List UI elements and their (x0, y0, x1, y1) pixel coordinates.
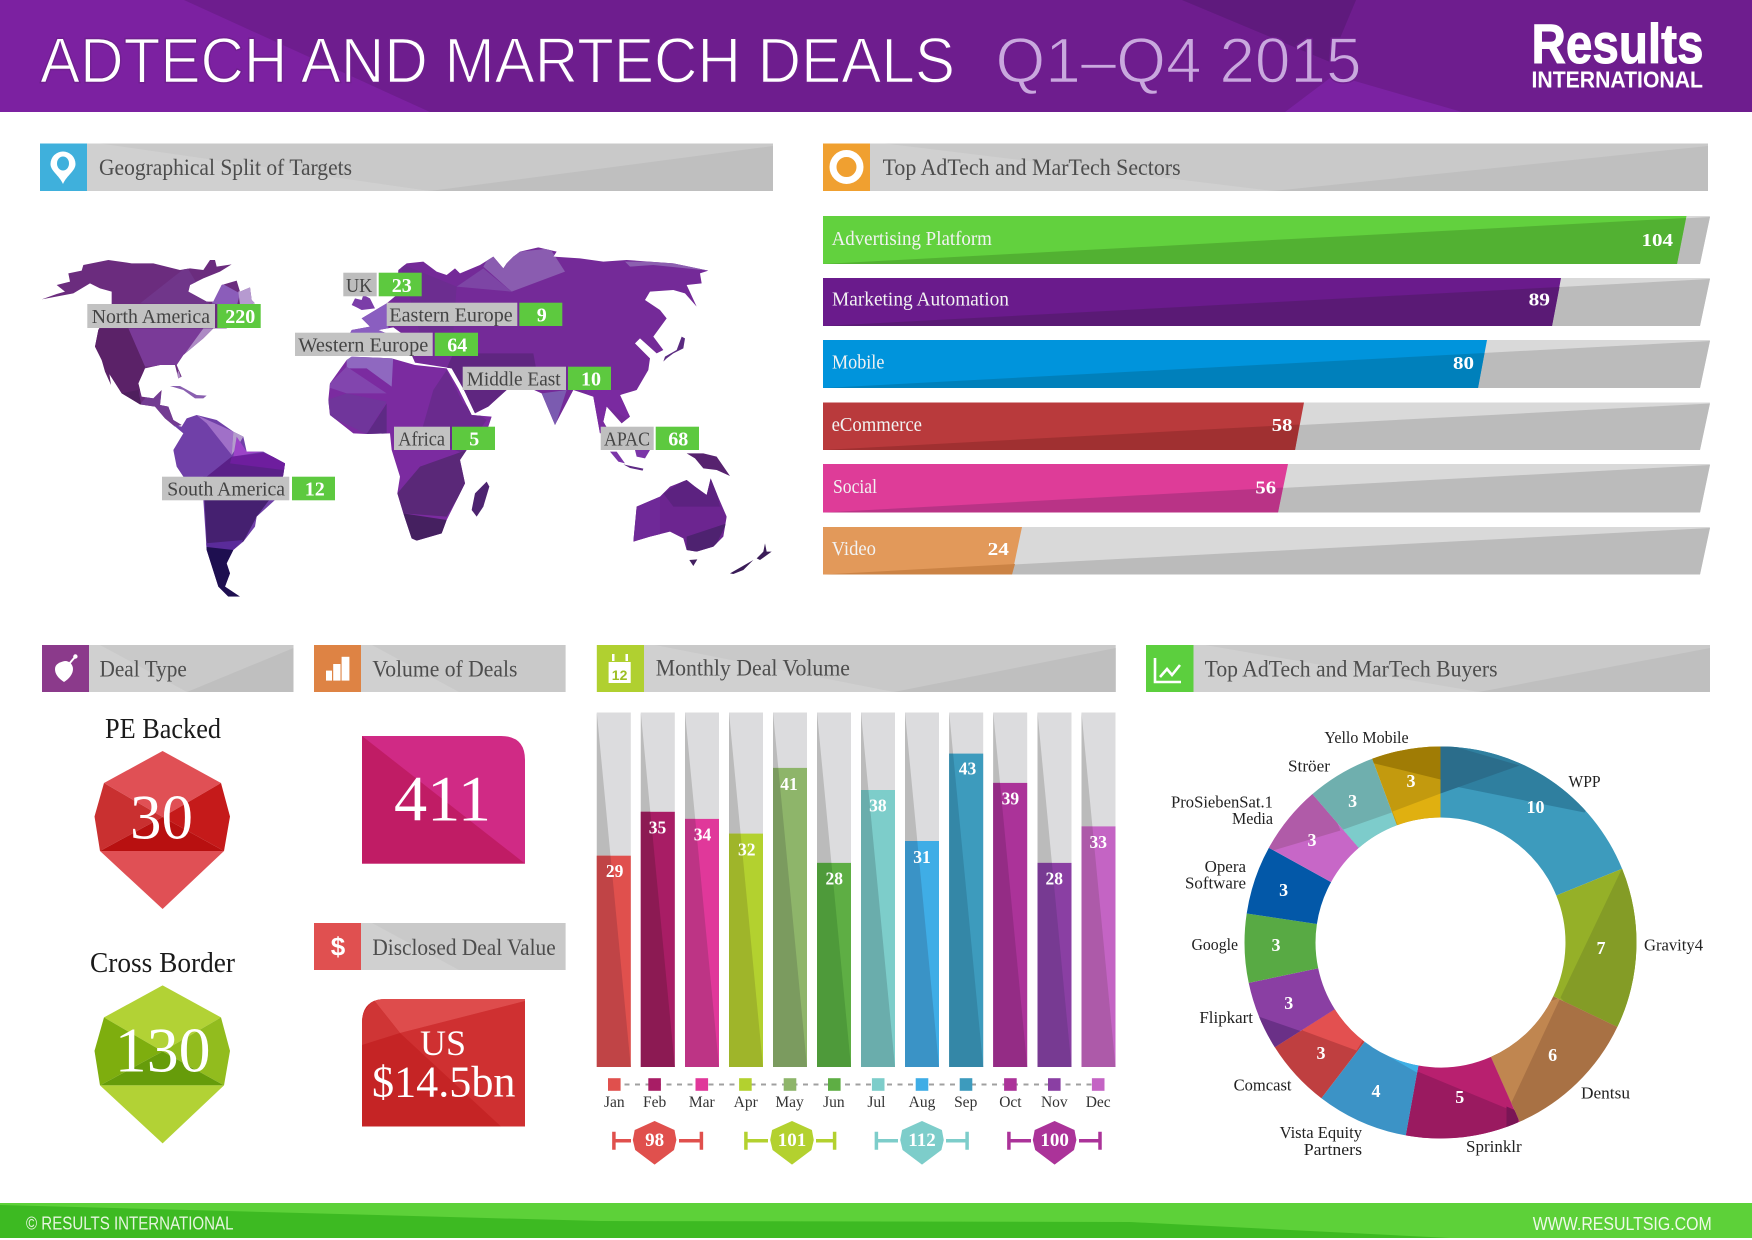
tag: Africa 5: Africa (398, 428, 445, 450)
heading: top sectors: Top AdTech and MarTech Sectors (883, 155, 1181, 180)
donut values: 3 (1316, 1043, 1326, 1063)
island: tasmania (689, 559, 697, 566)
tag: Western Europe 64 (295, 333, 478, 357)
footer: website: WWW.RESULTSIG.COM (1533, 1214, 1712, 1234)
bar: Video 24: Video (832, 538, 876, 560)
donut chart (1244, 746, 1636, 1138)
badge: cross border 130: 130 (115, 1015, 210, 1086)
donut labels: WPP (1568, 772, 1601, 791)
bar: Sep 43: 43 (959, 759, 976, 779)
month legend: Apr (734, 1094, 759, 1111)
donut values: 3 (1406, 771, 1416, 791)
month legend: Feb (643, 1094, 666, 1111)
tag: North America 220: North America (92, 306, 210, 328)
bar: Jun 28: 28 (826, 868, 843, 888)
donut labels: ProSiebenSat.1 (1171, 792, 1273, 811)
badge: PE backed 30 (94, 751, 230, 909)
donut values: 3 (1284, 993, 1293, 1013)
bar: eCommerce 58: eCommerce (832, 414, 922, 436)
tag: North America 220: 220 (225, 306, 255, 328)
tag: Middle East 10: Middle East (467, 368, 561, 390)
donut values (1272, 771, 1606, 1107)
donut values: 10 (1526, 797, 1544, 817)
subtitle: period: Q1–Q4 2015 (996, 24, 1362, 96)
logo: Results International: INTERNATIONAL (1532, 66, 1703, 92)
quarter total: Q1 98 (614, 1121, 701, 1165)
map: north america (42, 260, 255, 427)
panel: monthly deal volume (597, 645, 1116, 1165)
icon: leaf with stem (55, 654, 78, 682)
panel: geographical split of targets (40, 144, 773, 610)
panel: top buyers (1146, 645, 1710, 1162)
tag: Western Europe 64: 64 (447, 335, 467, 357)
heading: top sectors (823, 144, 1708, 191)
bar: Video 24: 24 (988, 539, 1009, 559)
bar: Social 56: Social (833, 476, 877, 498)
tag: Africa 5 (394, 427, 495, 450)
quarter total: Q3 112 (876, 1121, 967, 1165)
month legend (604, 1078, 1111, 1111)
donut values: 3 (1308, 830, 1316, 850)
bar: Dec 33: 33 (1089, 832, 1107, 852)
segment: Google 3 (1245, 914, 1318, 983)
footer (0, 1203, 1752, 1238)
heading: volume of deals (314, 645, 566, 692)
donut labels: Comcast (1234, 1075, 1292, 1094)
heading: deal type (42, 645, 294, 692)
bar: Jun 28 (817, 712, 851, 1067)
donut labels: Gravity4 (1644, 936, 1703, 955)
bar: May 41 (773, 712, 807, 1067)
tag: North America 220 (87, 304, 261, 328)
bar: Video 24 (823, 527, 1710, 574)
bar: Oct 39 (993, 712, 1027, 1067)
donut labels: Vista Equity (1280, 1123, 1363, 1142)
logo: Results International (1532, 12, 1704, 92)
tag: UK 23: UK (346, 275, 372, 297)
donut labels: Dentsu (1581, 1084, 1630, 1102)
badge: PE backed 30: 30 (130, 782, 193, 853)
bar: Mobile 80: Mobile (832, 352, 885, 374)
segment: ProSiebenSat.1 Media 3 (1268, 794, 1359, 882)
tag: UK 23 (343, 273, 422, 297)
heading: geographical split: Geographical Split of Targets (99, 155, 352, 180)
segment: Sprinklr 5 (1406, 1056, 1520, 1138)
donut values: 3 (1272, 935, 1280, 955)
donut values: 6 (1548, 1045, 1557, 1065)
bar: Nov 28: 28 (1046, 868, 1063, 888)
tag: Eastern Europe 9: 9 (537, 305, 547, 327)
heading: geographical split (40, 144, 773, 191)
quarter total: Q2 101 (746, 1121, 835, 1165)
bar: Advertising Platform 104: 104 (1642, 230, 1673, 250)
badge: cross border 130 (94, 985, 230, 1143)
tag: Middle East 10 (463, 367, 611, 390)
icon: map pin (50, 152, 76, 184)
donut labels: Yello Mobile (1324, 728, 1409, 747)
tag: Eastern Europe 9: Eastern Europe (389, 305, 513, 327)
tag: South America 12 (162, 477, 335, 501)
bar: Aug 31: 31 (913, 847, 931, 867)
bar: Jul 38 (861, 712, 895, 1067)
bar: Marketing Automation 89 (823, 278, 1710, 326)
islands: south-east asia (610, 452, 625, 463)
bar: Mar 34: 34 (694, 825, 712, 845)
bar: Advertising Platform 104 (823, 216, 1710, 264)
donut values: 5 (1455, 1087, 1464, 1107)
bar: Dec 33 (1082, 712, 1116, 1067)
bar: Oct 39: 39 (1002, 788, 1019, 808)
panel: deal type (42, 645, 294, 1143)
heading: top buyers (1146, 645, 1710, 692)
segment: WPP 10 (1440, 746, 1622, 896)
stat card: US $14.5bn (362, 999, 525, 1126)
header banner (0, 0, 1752, 112)
bar: Nov 28 (1038, 712, 1072, 1067)
month legend: Dec (1086, 1094, 1111, 1111)
icon: line chart (1155, 658, 1181, 682)
stat card: US $14.5bn: US (420, 1023, 466, 1063)
tag: Western Europe 64: Western Europe (298, 335, 428, 357)
tag: APAC 68: 68 (668, 428, 688, 450)
tag: Eastern Europe 9 (387, 303, 562, 327)
icon: ring (833, 154, 860, 180)
panel: top sectors (823, 144, 1710, 574)
quarter total: Q4 100 (1009, 1121, 1100, 1165)
bar: Mobile 80: 80 (1453, 353, 1474, 373)
bar: Marketing Automation 89: 89 (1529, 290, 1550, 310)
month legend: Jan (604, 1094, 625, 1111)
quarter total: Q3 112: 112 (908, 1130, 936, 1151)
tag: APAC 68: APAC (604, 428, 650, 450)
bar: Social 56 (823, 464, 1710, 512)
month legend: Jul (867, 1094, 885, 1111)
donut labels: Flipkart (1199, 1008, 1253, 1027)
footer: copyright: © RESULTS INTERNATIONAL (26, 1214, 234, 1234)
bar: Marketing Automation 89: Marketing Automation (832, 289, 1009, 311)
heading: volume of deals: Volume of Deals (372, 656, 517, 682)
donut labels: Media (1232, 809, 1274, 828)
label: Cross Border: Cross Border (90, 947, 235, 979)
bar: Sep 43 (949, 712, 983, 1067)
donut labels: Partners (1304, 1140, 1362, 1159)
stat card: 411: 411 (394, 764, 491, 836)
icon: dollar: $ (331, 932, 346, 962)
donut labels: Opera (1205, 857, 1247, 876)
tag: South America 12: South America (167, 479, 285, 501)
label: PE Backed: PE Backed (105, 713, 221, 745)
segment: Flipkart 3 (1248, 968, 1335, 1048)
segment: Vista Equity Partners 4 (1322, 1042, 1418, 1136)
map: south america (173, 415, 285, 597)
donut labels: Google (1192, 935, 1238, 954)
donut values: 4 (1372, 1081, 1380, 1101)
bar: Social 56: 56 (1255, 478, 1276, 498)
donut values: 3 (1279, 880, 1288, 900)
world map (40, 243, 772, 610)
heading: top buyers: Top AdTech and MarTech Buyers (1205, 657, 1498, 682)
stat card: US $14.5bn: $14.5bn (372, 1058, 516, 1106)
island: madagascar (472, 482, 489, 517)
month legend: Sep (954, 1094, 978, 1111)
donut labels: Software (1185, 873, 1246, 892)
month legend: Mar (689, 1094, 716, 1111)
segment: Stroer 3 (1312, 758, 1397, 848)
peninsula: baja california (102, 360, 111, 385)
icon: calendar: 12 (612, 667, 628, 683)
donut labels (1171, 728, 1703, 1159)
bar: Mobile 80 (823, 340, 1710, 388)
panel: volume of deals (314, 645, 566, 864)
donut labels: Ströer (1288, 757, 1331, 776)
bar: Jan 29 (597, 712, 631, 1067)
donut labels: Sprinklr (1466, 1137, 1522, 1156)
month legend: Oct (999, 1094, 1022, 1111)
icon: calendar (609, 654, 631, 683)
bar: Mar 34 (685, 712, 719, 1067)
bar: Jan 29: 29 (606, 861, 624, 881)
bar: eCommerce 58 (823, 402, 1710, 450)
donut values: 7 (1596, 938, 1606, 958)
segment: Opera Software 3 (1247, 848, 1331, 924)
segment: Comcast 3 (1274, 1009, 1364, 1098)
month legend: Jun (823, 1094, 845, 1111)
bar: May 41: 41 (780, 774, 798, 794)
donut values: 3 (1348, 791, 1357, 811)
tag: UK 23: 23 (392, 275, 412, 297)
bar: Apr 32 (729, 712, 763, 1067)
tag: Middle East 10: 10 (581, 368, 601, 390)
heading: disclosed deal value (314, 923, 566, 970)
quarter total: Q2 101: 101 (778, 1130, 806, 1151)
bar: Feb 35 (641, 712, 675, 1067)
quarter total: Q1 98: 98 (645, 1130, 664, 1151)
icon: bar chart (326, 657, 349, 681)
panel: disclosed deal value (314, 923, 566, 1126)
islands: new zealand (730, 560, 753, 574)
bar: Jul 38: 38 (869, 795, 887, 815)
bar: Apr 32: 32 (738, 840, 756, 860)
segment: Gravity4 7 (1553, 868, 1636, 1027)
island: japan (663, 337, 685, 362)
month legend: Nov (1041, 1094, 1068, 1111)
island: uk (352, 295, 375, 310)
month legend: May (775, 1094, 804, 1111)
heading: monthly deal volume: Monthly Deal Volume (656, 656, 850, 681)
bar: Feb 35: 35 (649, 818, 666, 838)
tag: South America 12: 12 (305, 479, 325, 501)
heading: monthly deal volume (597, 645, 1116, 692)
island: caribbean (170, 386, 207, 398)
month legend: Aug (909, 1094, 936, 1111)
bar chart: monthly volume (597, 712, 1116, 1067)
map: europe, asia, africa, oceania (320, 243, 772, 574)
tag: Africa 5: 5 (469, 428, 479, 450)
segment: Dentsu 6 (1490, 996, 1618, 1122)
bar: Advertising Platform 104: Advertising Platform (832, 228, 992, 250)
heading: disclosed deal value: Disclosed Deal Value (372, 935, 556, 960)
quarter total: Q4 100: 100 (1040, 1130, 1069, 1151)
stat card: 411 (362, 736, 525, 864)
tag: APAC 68 (601, 427, 699, 450)
segment: Yello Mobile 3 (1372, 746, 1440, 826)
title: ADTECH AND MARTECH DEALS (40, 24, 955, 96)
logo: Results International: Results (1532, 12, 1704, 75)
heading: deal type: Deal Type (100, 656, 187, 682)
bar: Aug 31 (905, 712, 939, 1067)
bar: eCommerce 58: 58 (1272, 415, 1292, 435)
